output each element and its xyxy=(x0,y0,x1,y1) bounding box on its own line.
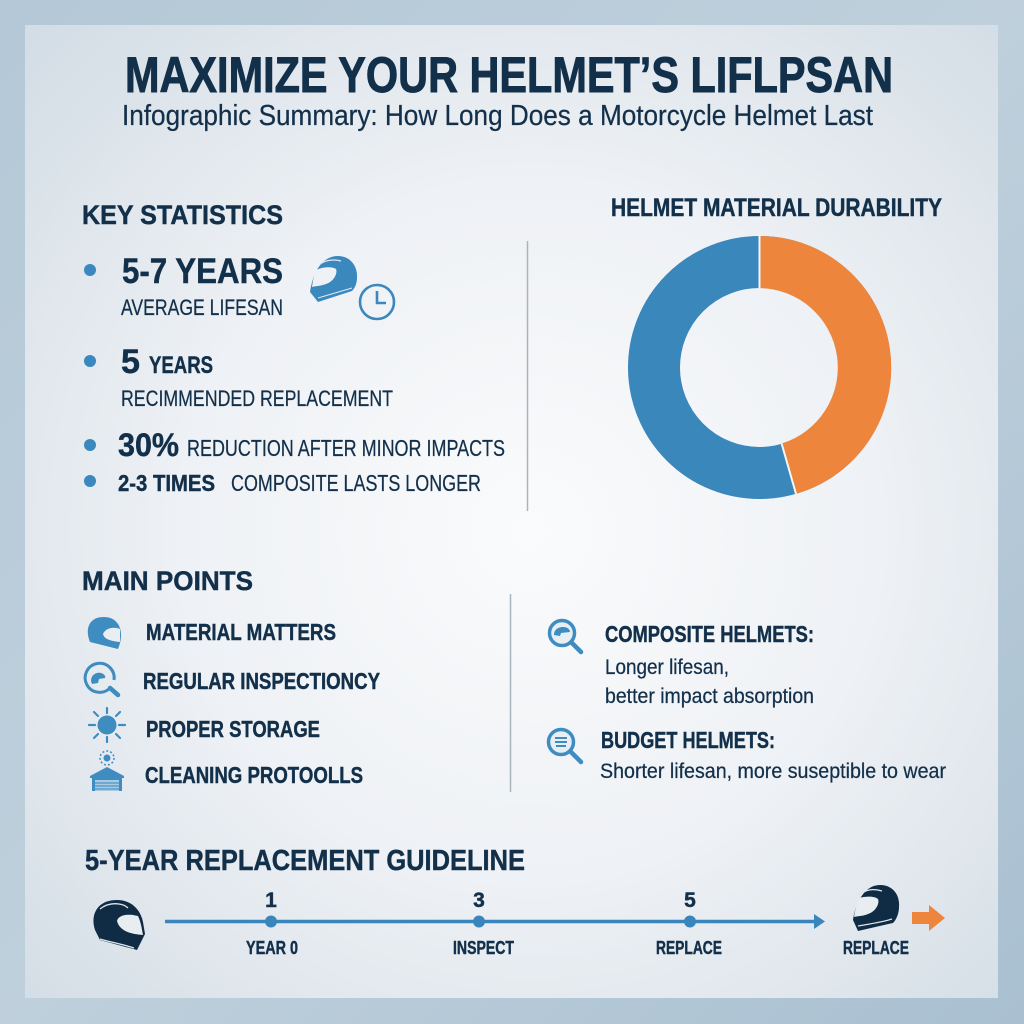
milestone: inspect: 3 xyxy=(473,889,485,912)
panel: helmet comparison xyxy=(548,620,946,783)
statistic: reduction after impacts: 30% xyxy=(118,427,179,463)
statistic: recommended replacement xyxy=(84,343,393,411)
end label: replace: REPLACE xyxy=(843,938,909,958)
point: cleaning protocols xyxy=(90,751,363,791)
statistic: reduction after impacts xyxy=(84,427,505,463)
heading: durability chart: HELMET MATERIAL DURABILITY xyxy=(611,194,942,222)
budget helmets xyxy=(548,727,946,783)
point: regular inspection xyxy=(85,663,380,695)
icon: end helmet xyxy=(853,885,899,931)
statistic: average lifespan xyxy=(84,252,283,320)
point: cleaning protocols: CLEANING PROTOOLLS xyxy=(145,762,363,788)
statistic: composite lasts longer xyxy=(84,470,481,496)
statistic: recommended replacement: YEARS xyxy=(149,352,213,379)
heading: main points: MAIN POINTS xyxy=(82,566,253,596)
milestone: year 0: YEAR 0 xyxy=(246,938,298,958)
donut chart xyxy=(654,236,891,494)
milestone: inspect xyxy=(453,889,514,958)
composite helmets: COMPOSITE HELMETS: xyxy=(605,621,814,647)
heading: replacement guideline: 5-YEAR REPLACEMENT GUIDELINE xyxy=(85,845,525,877)
icon: helmet with clock xyxy=(310,256,394,319)
budget helmets: Shorter lifesan, more suseptible to wear xyxy=(600,760,946,783)
statistic: reduction after impacts: REDUCTION AFTER MINOR IMPACTS xyxy=(187,435,505,461)
statistic: recommended replacement: RECIMMENDED REPLACEMENT xyxy=(121,386,393,411)
statistic: average lifespan: 5-7 YEARS xyxy=(122,252,283,291)
point: regular inspection: REGULAR INSPECTIONCY xyxy=(143,668,380,694)
statistic: composite lasts longer: 2-3 TIMES xyxy=(118,470,215,496)
statistic: composite lasts longer: COMPOSITE LASTS LONGER xyxy=(231,470,481,496)
panel: main points xyxy=(82,566,380,791)
milestone: replace: 5 xyxy=(684,889,696,912)
arrow: orange xyxy=(912,905,945,931)
composite helmets: Longer lifesan, xyxy=(605,656,729,679)
milestone: replace xyxy=(656,889,722,958)
point: material matters: MATERIAL MATTERS xyxy=(146,619,336,645)
point: material matters xyxy=(88,617,336,649)
divider xyxy=(526,241,528,511)
point: proper storage xyxy=(89,708,320,742)
panel: key statistics xyxy=(82,200,505,496)
composite helmets xyxy=(550,620,814,708)
heading: key statistics: KEY STATISTICS xyxy=(82,200,283,230)
budget helmets: BUDGET HELMETS: xyxy=(601,727,775,753)
milestone: year 0: 1 xyxy=(265,889,277,912)
subtitle: Infographic Summary: How Long Does a Motorcycle Helmet Last xyxy=(122,100,873,132)
composite helmets: better impact absorption xyxy=(605,685,814,708)
statistic: recommended replacement: 5 xyxy=(121,343,140,381)
timeline arrow xyxy=(165,914,825,929)
milestone: inspect: INSPECT xyxy=(453,938,514,958)
panel: helmet material durability xyxy=(611,194,942,494)
panel: replacement guideline xyxy=(85,845,945,958)
milestone: replace: REPLACE xyxy=(656,938,722,958)
point: proper storage: PROPER STORAGE xyxy=(146,716,320,742)
divider xyxy=(510,594,512,792)
icon: start helmet xyxy=(93,900,145,950)
milestone: year 0 xyxy=(246,889,298,958)
statistic: average lifespan: AVERAGE LIFESAN xyxy=(121,295,283,320)
